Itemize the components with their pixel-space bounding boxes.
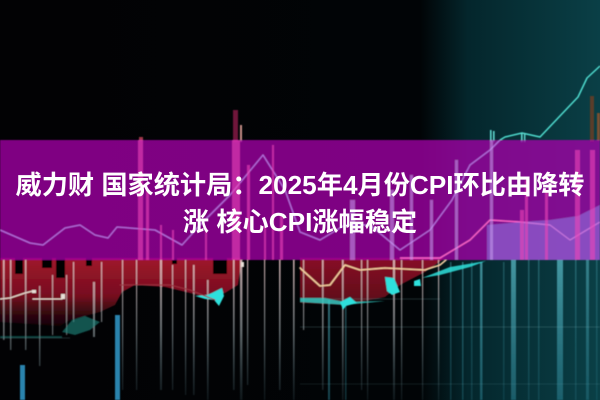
teal lower trail xyxy=(300,298,385,305)
faint horizontal grid lines xyxy=(0,299,600,384)
upper tick bars xyxy=(139,96,600,142)
teal right-side stripes xyxy=(328,260,598,400)
magenta title band xyxy=(0,140,600,260)
cyan highlights xyxy=(195,261,486,310)
white and orange price line xyxy=(0,260,446,300)
red area centre xyxy=(300,258,445,305)
pink bars in band xyxy=(138,140,595,260)
teal scatter trail xyxy=(0,316,100,338)
chart markers xyxy=(32,262,244,299)
title xyxy=(16,170,584,237)
blue volume bars xyxy=(20,315,120,400)
lilac bars in band xyxy=(350,140,493,260)
cyan tick bars above band xyxy=(490,130,525,142)
title: 威力财 国家统计局：2025年4月份CPI环比由降转 xyxy=(16,170,584,200)
band chart lines xyxy=(0,140,600,258)
cyan rising line xyxy=(500,66,600,140)
periwinkle area in band xyxy=(487,205,600,260)
title: 涨 核心CPI涨幅稳定 xyxy=(183,207,417,237)
red candlestick area xyxy=(0,258,242,326)
black gaps in red area xyxy=(15,258,227,278)
pale vertical price bars xyxy=(3,260,439,400)
